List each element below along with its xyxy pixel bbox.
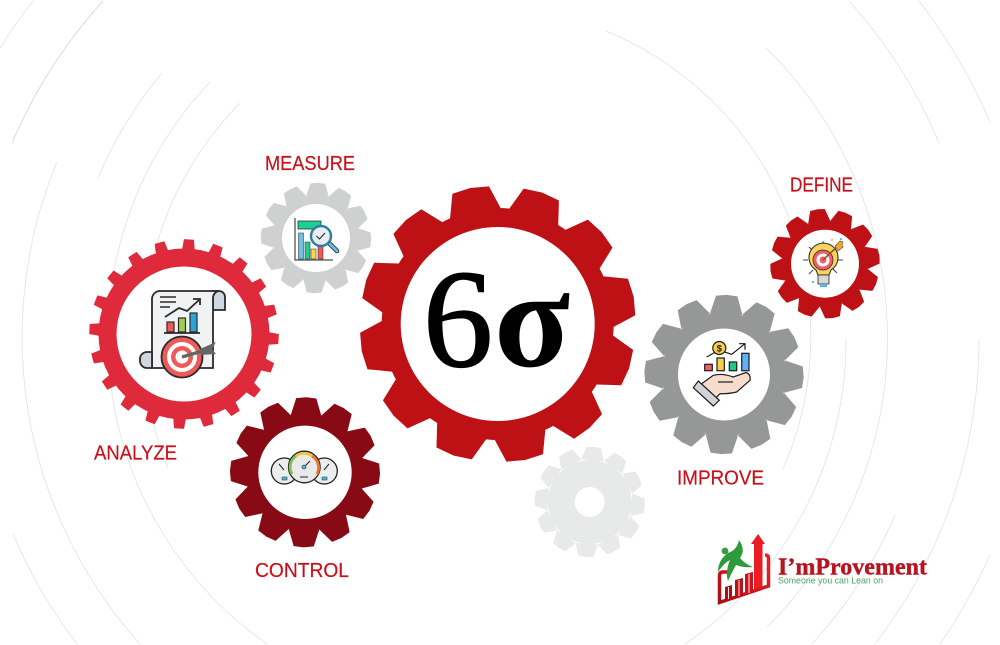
logo tagline: Someone you can Lean on <box>778 576 883 586</box>
logo: I'mProvement <box>718 534 927 602</box>
gear: improve <box>642 292 806 457</box>
central gear: six sigma <box>322 148 673 500</box>
logo wordmark: I’mProvement <box>778 554 927 580</box>
icon: hand with chart and coin: $ <box>717 344 723 354</box>
icon: speedometer gauges <box>271 451 337 484</box>
gear: measure <box>259 181 373 295</box>
label: analyze: ANALYZE <box>94 443 177 465</box>
label: define: DEFINE <box>790 175 853 197</box>
icon: report with target <box>140 291 225 378</box>
logo icon <box>718 534 768 602</box>
label: measure: MEASURE <box>265 153 355 175</box>
ghost gear <box>531 443 649 561</box>
gear: control <box>229 396 381 549</box>
six sigma symbol: σ <box>494 242 570 397</box>
icon: light bulb with target <box>803 238 843 287</box>
label: control: CONTROL <box>255 560 349 582</box>
gear: analyze <box>89 239 279 429</box>
label: improve: IMPROVE <box>677 467 764 489</box>
icon: hand with chart and coin <box>693 342 750 406</box>
six sigma symbol: 6 <box>423 242 493 397</box>
icon: chart with magnifier <box>295 218 337 260</box>
gear: define <box>753 192 897 335</box>
